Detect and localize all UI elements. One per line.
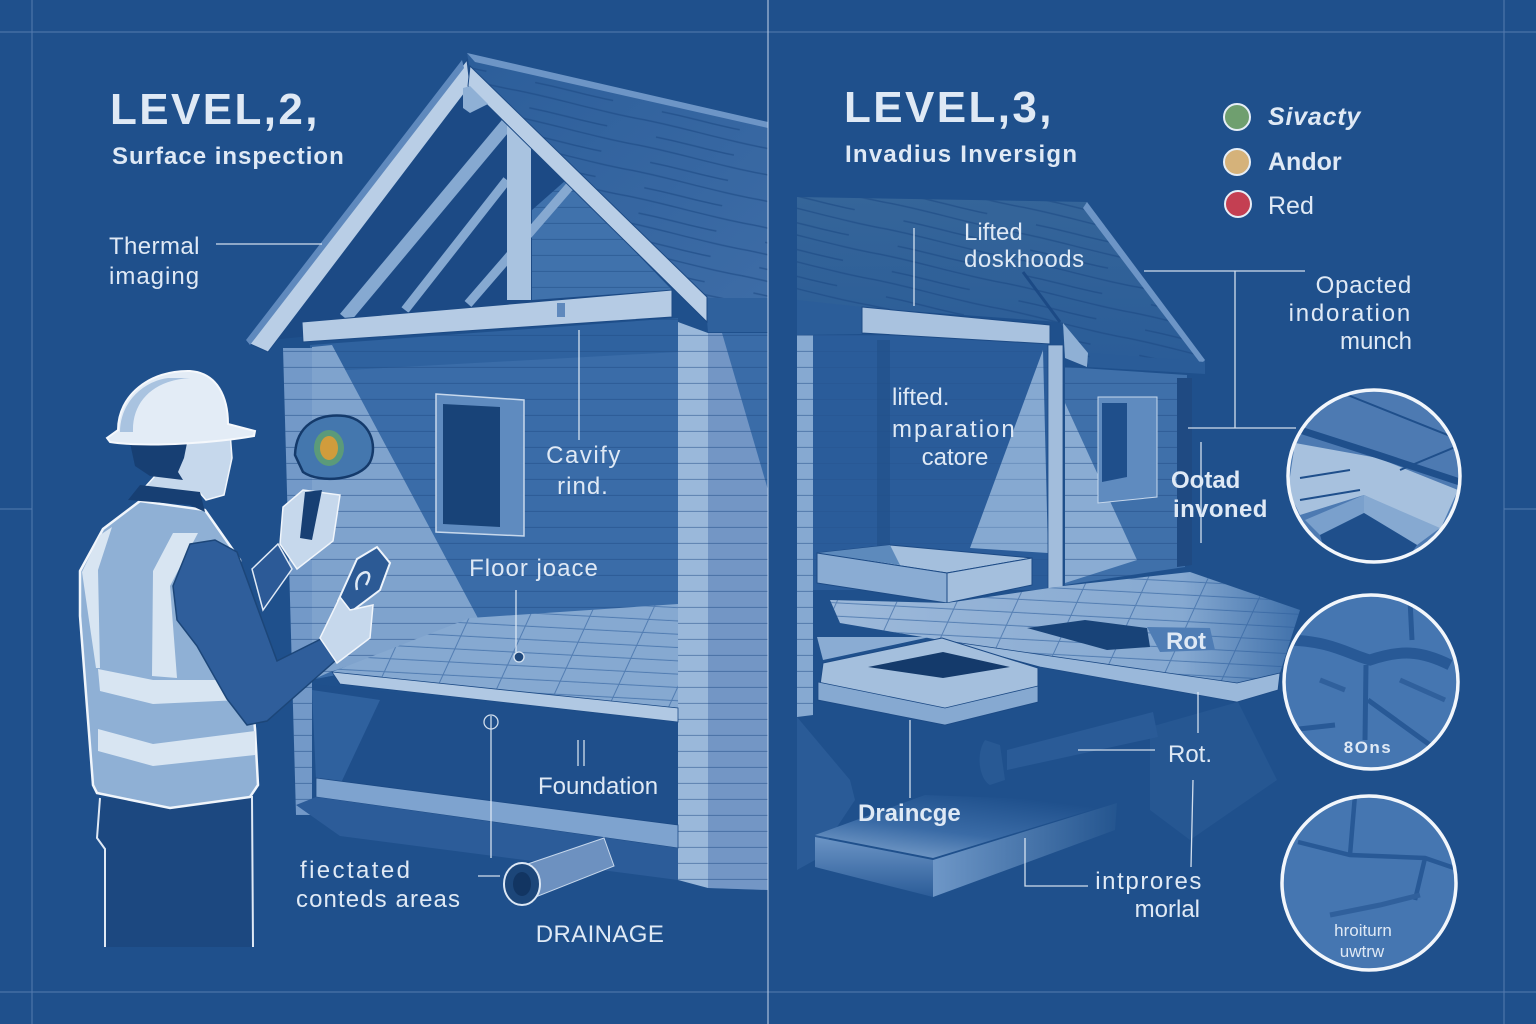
left wall post (283, 348, 312, 815)
masonry block (1150, 702, 1277, 840)
right wall (708, 333, 768, 890)
hair (130, 438, 188, 480)
dark corner strip (1177, 378, 1192, 567)
right labels: Rot (1166, 628, 1206, 655)
roof plane (467, 53, 768, 300)
pipe under deck (1007, 712, 1158, 770)
ridge valley (1023, 272, 1060, 322)
rot patch (1147, 627, 1215, 652)
eave band (705, 298, 768, 332)
deck front edge (940, 640, 1280, 702)
right labels: mparation (892, 416, 1017, 443)
right heading: LEVEL,3, (844, 83, 1054, 132)
deck hole (1027, 620, 1150, 650)
detail circle: rot: 8Ons (1344, 738, 1392, 757)
detail circle: masonry: uwtrw (1340, 942, 1385, 961)
trousers (97, 796, 253, 947)
right labels: munch (1340, 328, 1412, 355)
attic void (270, 80, 672, 340)
right labels: Ootad (1171, 467, 1240, 494)
vest left strip (82, 527, 112, 668)
lifted beam (862, 307, 1050, 344)
connector lines (216, 228, 1305, 886)
upper beam (302, 290, 672, 342)
left post (797, 335, 813, 717)
eave (797, 300, 862, 335)
interior (813, 335, 1050, 590)
vest band upper (98, 669, 240, 704)
gable strip (1063, 323, 1088, 367)
vest band lower (98, 729, 255, 766)
rear wall base (797, 717, 855, 870)
right labels: doskhoods (964, 246, 1085, 273)
gutter (1088, 353, 1205, 374)
beam bolt (557, 303, 565, 317)
thermal camera (295, 416, 373, 479)
right labels: Draincge (858, 800, 961, 827)
deck left fragment (817, 637, 930, 660)
small window (1098, 397, 1157, 503)
left labels: rind. (557, 473, 609, 500)
inspector figure (80, 371, 390, 947)
right heading: Invadius Inversign (845, 141, 1078, 168)
left heading: Surface inspection (112, 143, 345, 170)
lower hand (320, 597, 373, 663)
left labels: DRAINAGE (536, 921, 664, 948)
roof trim (1083, 202, 1205, 364)
legend (1224, 103, 1361, 220)
foundation plinth (296, 797, 678, 880)
left labels: fiectated (300, 857, 412, 884)
right house (797, 197, 1300, 897)
detail circle: shingles (1285, 388, 1465, 570)
left labels: Foundation (538, 773, 658, 800)
detail circle: masonry: hroiturn (1334, 921, 1392, 940)
inner column (877, 340, 890, 550)
sleeve (173, 540, 335, 725)
hatch opening (868, 652, 1010, 678)
vest shoulder strip (152, 533, 198, 678)
left labels (109, 233, 664, 948)
left labels: Cavify (546, 442, 622, 469)
centre fold line (767, 0, 769, 1024)
legend: Sivacty (1268, 103, 1361, 131)
upper hand and grip (280, 490, 340, 569)
right labels: Rot. (1168, 741, 1212, 768)
hatch (818, 638, 1038, 725)
left labels: imaging (109, 263, 200, 290)
king post (507, 125, 531, 300)
attic gable panel (532, 180, 672, 300)
left house (246, 53, 768, 905)
right labels: indoration (1289, 300, 1412, 327)
second tool (338, 547, 390, 620)
corner post (678, 322, 708, 888)
right labels: invoned (1173, 496, 1268, 523)
gable trim left (248, 60, 470, 352)
roof ridge trim (467, 53, 768, 128)
vest (80, 501, 258, 808)
neck and face (146, 432, 232, 500)
right labels: lifted. (892, 384, 949, 411)
attic rafters (345, 124, 570, 318)
crawl space (312, 684, 678, 826)
foundation beam (316, 778, 678, 848)
right labels: Lifted (964, 219, 1023, 246)
stored box (817, 545, 1032, 573)
legend: Andor (1268, 148, 1342, 176)
detail circle: rot (1280, 590, 1465, 770)
back wall (310, 318, 678, 680)
rear forearm (252, 544, 292, 610)
right labels (858, 219, 1412, 923)
outer wall (1065, 367, 1187, 585)
left labels: Floor joace (469, 555, 599, 582)
pipe collar (980, 740, 1005, 785)
right heading (844, 83, 1078, 168)
legend: Red (1268, 192, 1314, 220)
left roof section (797, 197, 1205, 372)
left heading (110, 85, 345, 170)
detail circle: masonry (1280, 795, 1460, 975)
left labels: conteds areas (296, 886, 461, 913)
left heading: LEVEL,2, (110, 85, 320, 134)
window (436, 394, 524, 536)
right labels: catore (922, 444, 988, 471)
gable trim right (468, 66, 707, 322)
hard hat (107, 371, 255, 444)
apex bracket (463, 86, 488, 113)
drainage pipe (516, 838, 614, 900)
right labels: Opacted (1316, 272, 1412, 299)
tool hook (356, 572, 369, 590)
interior light (970, 350, 1048, 553)
drain block (815, 795, 1117, 858)
collar (128, 485, 205, 512)
right post (1048, 345, 1063, 590)
right labels: intprores (1095, 868, 1203, 895)
floor deck (332, 604, 678, 708)
deck (830, 572, 1300, 683)
left labels: Thermal (109, 233, 200, 260)
right labels: morlal (1135, 896, 1200, 923)
